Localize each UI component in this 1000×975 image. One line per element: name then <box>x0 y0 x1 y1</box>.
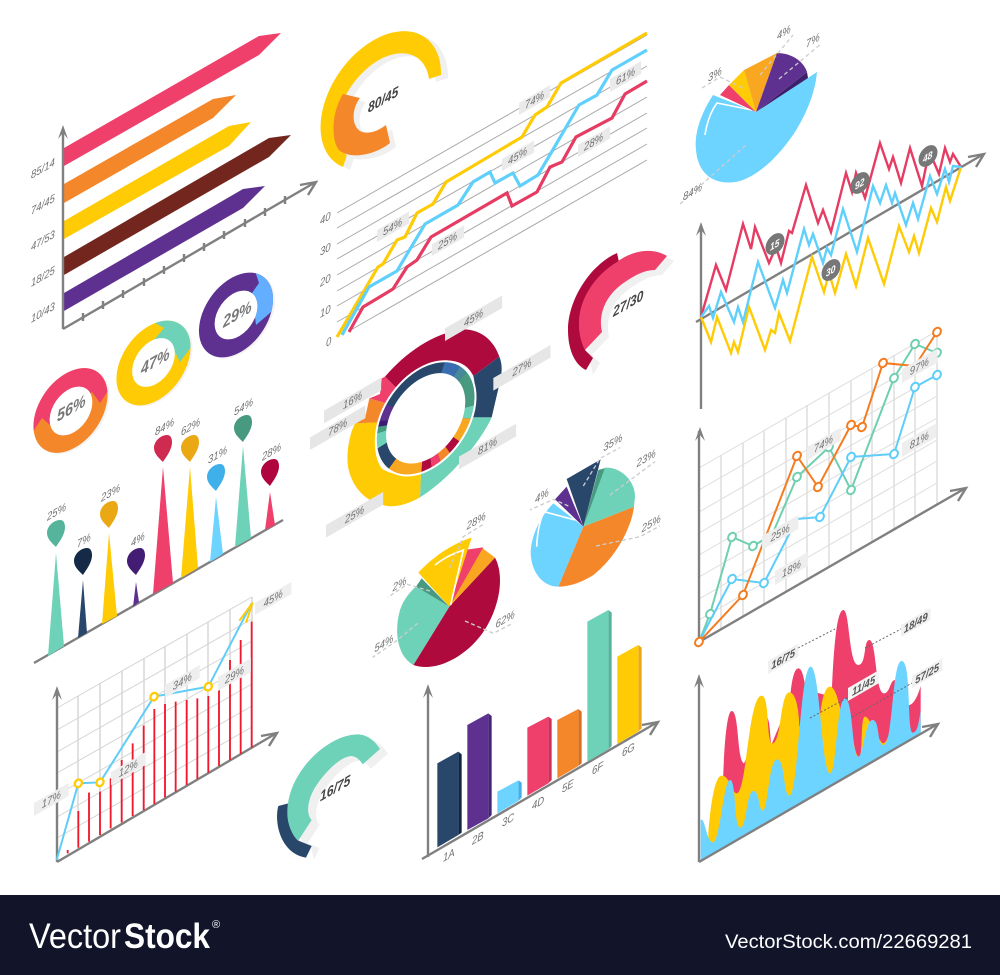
labels <box>374 510 515 656</box>
value badges: 15 <box>770 237 780 254</box>
value tags: 25% <box>437 230 457 254</box>
axis labels <box>31 156 56 326</box>
donut 47% <box>116 320 192 406</box>
axis labels: 74/45 <box>31 192 56 218</box>
y axis labels: 30 <box>320 240 331 259</box>
value tags: 17% <box>42 788 61 812</box>
y axis labels: 40 <box>320 209 331 228</box>
y axis labels: 10 <box>320 302 331 321</box>
value tags: 12% <box>119 757 138 781</box>
baseline <box>34 520 283 663</box>
labels: 54% <box>374 633 394 656</box>
drops <box>47 415 279 575</box>
bars <box>437 610 642 847</box>
footer logo: Stock <box>124 917 210 956</box>
drop labels: 62% <box>181 416 200 439</box>
inner ring segments <box>376 362 474 474</box>
value tags: 81% <box>910 429 929 453</box>
ring tags: 81% <box>478 435 497 458</box>
axis labels: 18/25 <box>31 264 56 290</box>
panel: three donuts <box>33 272 275 454</box>
blue series <box>699 369 943 642</box>
ring tags: 16% <box>343 389 362 412</box>
footer logo: ® <box>212 919 220 931</box>
value tags: 97% <box>910 355 929 379</box>
donut 56% <box>33 368 110 454</box>
bar labels: 1A <box>443 846 455 865</box>
axes <box>58 125 316 329</box>
leader lines <box>798 628 912 718</box>
large segmented ring <box>347 329 502 506</box>
footer bar <box>0 895 1000 975</box>
donut 56%: 56% <box>57 391 86 426</box>
bar labels: 5E <box>562 777 574 796</box>
drop labels: 54% <box>234 396 253 419</box>
ring tags: 27% <box>512 357 532 380</box>
spikes <box>48 446 275 656</box>
value badges: 48 <box>922 149 933 167</box>
red bars <box>68 622 252 853</box>
ring tags: 45% <box>464 307 483 330</box>
axis labels: 10/43 <box>31 300 56 326</box>
value badges <box>762 142 941 284</box>
labels: 4% <box>535 486 549 506</box>
ring tags: 78% <box>328 416 347 439</box>
leader lines <box>530 448 660 546</box>
axes <box>695 427 966 642</box>
panel: ring gauge 80/45: 80/45 <box>368 82 398 116</box>
bar labels: 4D <box>532 794 544 813</box>
panel: ring gauge 16/75 <box>277 734 388 860</box>
drop labels: 4% <box>131 530 145 550</box>
axes <box>694 674 938 862</box>
labels: 25% <box>641 513 661 536</box>
pie labels: 4% <box>777 23 791 43</box>
trend line <box>57 603 253 860</box>
labels: 35% <box>603 432 623 455</box>
teal series <box>699 338 943 642</box>
panel: top right pie chart <box>680 23 822 204</box>
drop labels: 25% <box>46 501 66 525</box>
axes <box>52 686 277 862</box>
axis labels: 85/14 <box>31 156 55 182</box>
value badges: 30 <box>826 263 836 280</box>
panel: ring gauge 80/45 <box>321 31 448 170</box>
panel: ring gauge 16/75: 16/75 <box>320 771 350 805</box>
bar labels: 6F <box>592 759 604 778</box>
panel: grid chart with three nodes lines <box>693 326 966 648</box>
value tags: 74% <box>814 433 833 456</box>
pie chart: orange <box>530 432 661 587</box>
axes <box>422 684 658 859</box>
y axis labels <box>319 209 332 350</box>
zigzag series <box>701 143 961 353</box>
panel: three line chart <box>319 33 647 350</box>
panel: horizontal arrow bar chart <box>31 33 316 329</box>
drop labels: 23% <box>100 482 120 506</box>
bar labels: 2B <box>471 829 484 849</box>
value tags: 54% <box>383 216 402 239</box>
orange series <box>693 326 943 648</box>
ring tags: 25% <box>344 504 364 527</box>
pie labels: 7% <box>806 31 820 51</box>
pie labels: 84% <box>683 181 702 204</box>
panel: centre charts group (zoomed coordinates) <box>310 295 661 667</box>
bar labels <box>443 740 635 865</box>
value tags <box>34 582 291 816</box>
drop labels: 84% <box>155 416 174 439</box>
labels: 28% <box>466 510 486 533</box>
drop labels: 28% <box>261 441 281 465</box>
donut 47%: 47% <box>140 344 170 380</box>
value tags: 74% <box>525 89 544 112</box>
axis labels: 47/53 <box>31 228 56 254</box>
value tags: 29% <box>224 664 244 688</box>
panel: area wave chart <box>694 608 942 862</box>
panel: ring gauge 27/30 <box>568 251 674 375</box>
value tags <box>377 61 641 257</box>
drop labels: 7% <box>77 531 91 551</box>
axes <box>696 154 984 409</box>
value badges: 92 <box>855 176 865 193</box>
arrow bars <box>64 33 291 311</box>
bar labels: 3C <box>502 811 514 830</box>
drop labels: 31% <box>208 444 227 467</box>
donut 29%: 29% <box>222 297 252 333</box>
value tags: 18/49 <box>904 610 928 636</box>
value tags <box>762 348 938 585</box>
donut 29% <box>198 272 275 358</box>
grid <box>699 331 937 629</box>
value tags <box>768 608 942 702</box>
panel: grid chart with red bars <box>34 582 291 862</box>
value tags: 45% <box>264 587 283 611</box>
labels: 2% <box>392 575 407 595</box>
leader lines <box>680 35 822 204</box>
panel: teardrop pin chart <box>34 396 283 663</box>
drop labels <box>46 396 281 551</box>
value tags: 25% <box>770 522 790 546</box>
wave areas <box>701 610 921 862</box>
y axis labels: 20 <box>319 271 331 291</box>
labels: 62% <box>496 608 515 631</box>
grid lines <box>337 35 647 331</box>
pie labels <box>683 23 820 204</box>
footer id: VectorStock.com/22669281 <box>725 932 972 953</box>
value tags: 45% <box>508 145 527 168</box>
ring tags <box>310 295 550 538</box>
pie labels: 3% <box>708 65 722 85</box>
value tags: 28% <box>583 131 603 155</box>
value tags: 57/25 <box>915 661 940 687</box>
value tags: 16/75 <box>771 646 796 673</box>
footer logo: Vector <box>29 917 121 956</box>
y axis labels: 0 <box>326 334 332 350</box>
pie chart: crimson <box>373 510 515 667</box>
value tags: 18% <box>782 558 801 581</box>
bar labels: 6G <box>622 740 635 760</box>
value tags: 34% <box>173 670 192 694</box>
labels: 23% <box>636 447 656 471</box>
value tags: 61% <box>616 65 635 89</box>
panel: ring gauge 27/30: 27/30 <box>612 286 643 321</box>
labels <box>535 432 661 536</box>
grid <box>57 597 252 850</box>
panel: zigzag line chart <box>696 142 984 409</box>
data lines <box>337 33 647 337</box>
leader lines <box>373 523 513 657</box>
value tags: 11/45 <box>852 673 876 699</box>
panel: 3D bar chart <box>422 610 658 865</box>
